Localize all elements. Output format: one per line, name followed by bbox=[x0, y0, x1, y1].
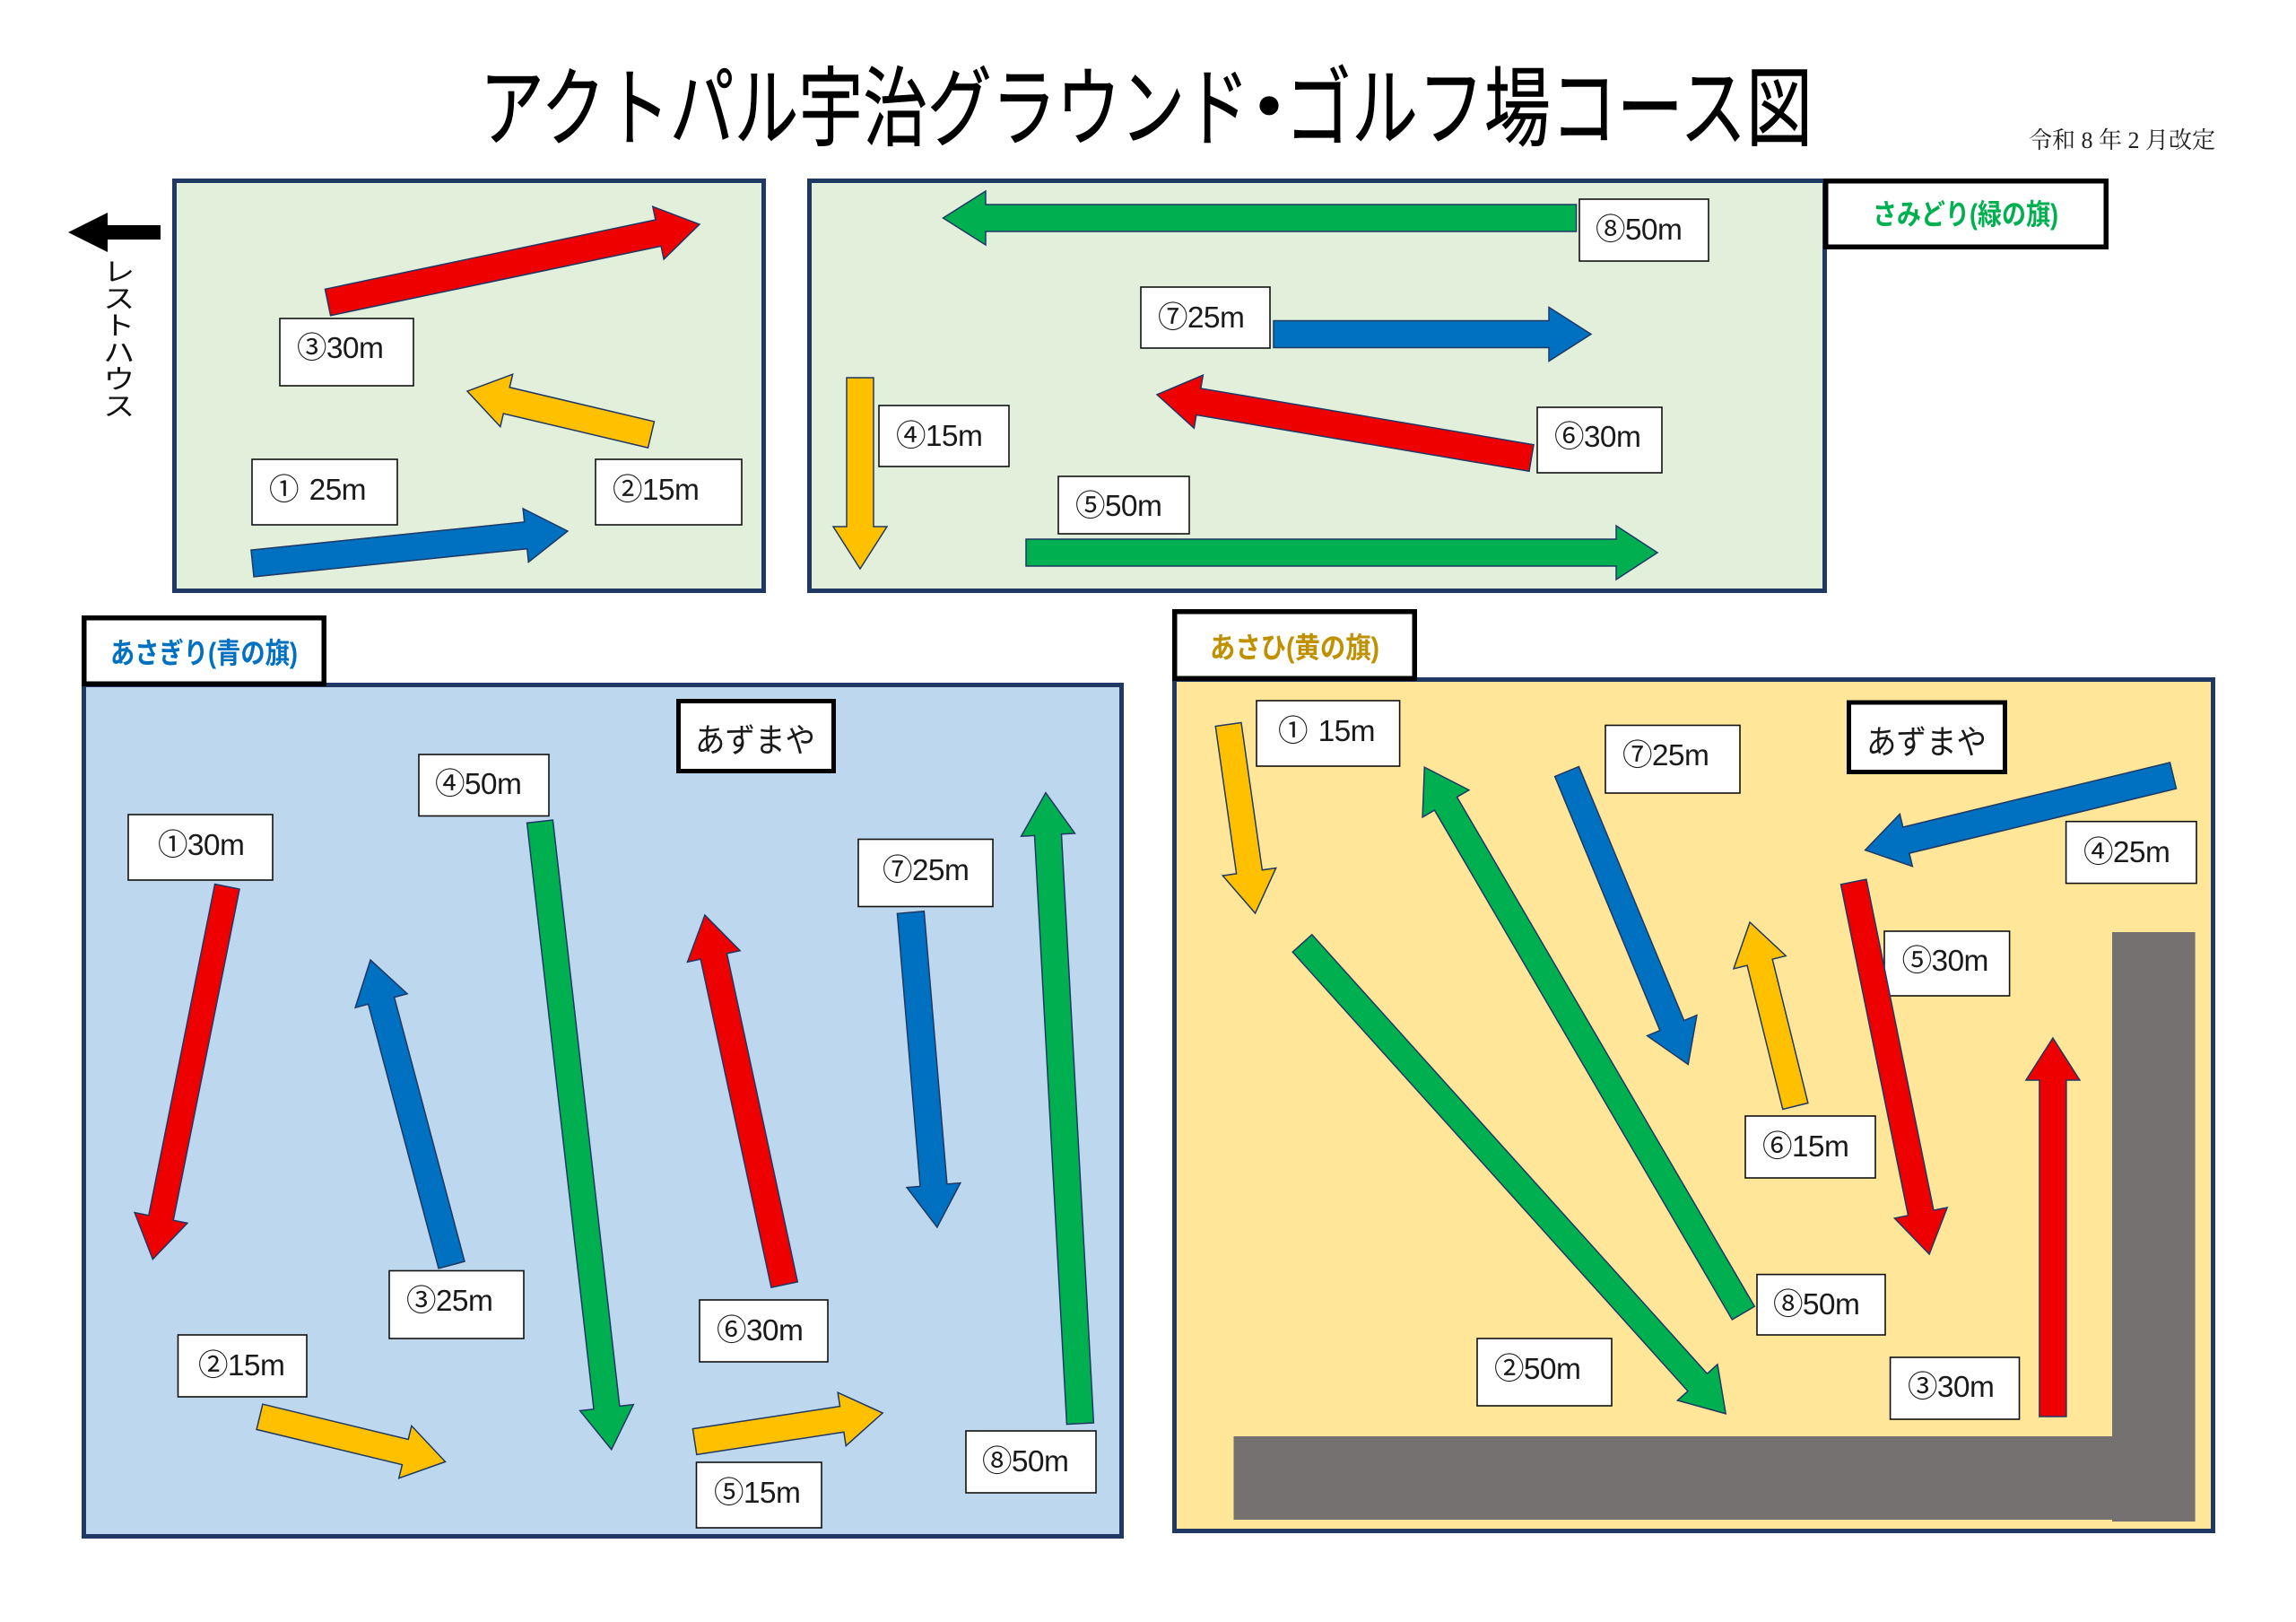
arrow: hole 4 blue bbox=[1859, 749, 2179, 876]
label: hole 5: ⑤50m bbox=[1075, 490, 1161, 523]
arrow: hole 2 green bbox=[1283, 925, 1745, 1432]
arrow: hole 8 green bbox=[1019, 791, 1107, 1425]
label: hole 3 bbox=[280, 318, 413, 386]
label: hole 1: ①30m bbox=[158, 829, 244, 862]
tag: yellow flag course bbox=[1175, 612, 1414, 678]
arrow: hole 8 green bbox=[944, 191, 1577, 245]
label: hole 6: ⑥15m bbox=[1762, 1130, 1848, 1164]
arrow: hole 5 green bbox=[1026, 526, 1657, 580]
callout: azumaya bbox=[1849, 702, 2005, 772]
label: hole 2 bbox=[178, 1335, 307, 1397]
tag: blue flag course: あさぎり(青の旗) bbox=[110, 637, 298, 669]
revision date: 令和 8 年 2 月改定 bbox=[2029, 127, 2215, 153]
label: hole 1: ① 15m bbox=[1278, 715, 1375, 748]
label: hole 6: ⑥30m bbox=[1554, 421, 1640, 454]
label: hole 4: ④15m bbox=[896, 420, 982, 453]
arrow: hole 6 red bbox=[1152, 368, 1536, 484]
arrow: hole 1 red bbox=[126, 881, 254, 1264]
label: hole 5 bbox=[1058, 476, 1189, 534]
title: ゴルフ場コース図 bbox=[1285, 60, 1813, 158]
label: hole 4 bbox=[2066, 822, 2196, 884]
label: hole 1 bbox=[128, 815, 273, 880]
label: hole 3: ③30m bbox=[1908, 1371, 1994, 1404]
label: hole 3 bbox=[389, 1270, 524, 1339]
label: hole 3 bbox=[1891, 1357, 2020, 1419]
label: hole 8 bbox=[1579, 199, 1709, 261]
panel: blue course bbox=[84, 685, 1121, 1536]
arrow: to rest house bbox=[68, 213, 161, 252]
label: hole 8: ⑧50m bbox=[1596, 214, 1682, 247]
label: hole 5: ⑤30m bbox=[1902, 945, 1988, 978]
label: hole 7: ⑦25m bbox=[1158, 301, 1244, 335]
arrow: hole 2 yellow bbox=[461, 365, 657, 461]
label: hole 5 bbox=[696, 1462, 822, 1528]
label: hole 2 bbox=[596, 459, 742, 525]
label: hole 5 bbox=[1884, 931, 2010, 996]
label: hole 3: ③30m bbox=[297, 332, 383, 365]
arrow: hole 7 blue bbox=[1274, 307, 1591, 361]
tag: yellow flag course: あさひ(黄の旗) bbox=[1210, 632, 1379, 664]
arrow: hole 2 yellow bbox=[253, 1391, 452, 1488]
label: hole 4: ④25m bbox=[2083, 836, 2170, 869]
arrow: hole 5 yellow bbox=[691, 1386, 887, 1469]
label: hole 7 bbox=[858, 840, 993, 906]
label: hole 2 bbox=[1477, 1339, 1612, 1406]
label: hole 4 bbox=[419, 754, 549, 816]
arrow: hole 4 green bbox=[513, 818, 639, 1452]
label: hole 5: ⑤15m bbox=[714, 1477, 800, 1510]
label: hole 1 bbox=[252, 459, 397, 525]
arrow: hole 1 yellow bbox=[1202, 720, 1282, 917]
arrow: hole 8 green bbox=[1401, 754, 1767, 1327]
label: hole 3: ③25m bbox=[406, 1285, 492, 1318]
label: hole 7 bbox=[1605, 725, 1740, 793]
callout: azumaya: あずまや bbox=[695, 722, 815, 759]
arrow: hole 7 blue bbox=[1542, 762, 1713, 1075]
label: hole 4: ④50m bbox=[435, 768, 521, 801]
arrow: hole 5 red bbox=[1827, 876, 1956, 1260]
label: hole 1: ① 25m bbox=[269, 474, 366, 507]
label: hole 6 bbox=[1537, 407, 1662, 473]
label: hole 6 bbox=[700, 1300, 828, 1362]
panel: yellow course bbox=[1175, 680, 2213, 1530]
tag: green flag course bbox=[1826, 181, 2106, 247]
label: hole 7 bbox=[1141, 287, 1270, 348]
label: hole 8: ⑧50m bbox=[982, 1445, 1068, 1478]
label: hole 6 bbox=[1745, 1116, 1875, 1178]
arrow: hole 3 blue bbox=[344, 953, 477, 1272]
label: hole 7: ⑦25m bbox=[1622, 739, 1709, 772]
label: hole 2: ②15m bbox=[613, 474, 699, 507]
label: hole 8: ⑧50m bbox=[1773, 1288, 1859, 1321]
label: hole 8 bbox=[966, 1431, 1096, 1493]
arrow: hole 1 blue bbox=[249, 504, 570, 590]
arrow: hole 6 yellow bbox=[1724, 916, 1822, 1112]
arrow: hole 7 blue bbox=[884, 910, 964, 1229]
tag: blue flag course bbox=[84, 618, 324, 684]
arrow: hole 4 yellow bbox=[833, 378, 887, 569]
arrow: hole 3 red bbox=[2026, 1038, 2080, 1417]
callout: azumaya: あずまや bbox=[1866, 724, 1987, 761]
arrow: hole 3 red bbox=[322, 198, 705, 328]
label: hole 6: ⑥30m bbox=[717, 1314, 803, 1347]
callout: azumaya bbox=[678, 702, 834, 772]
label: hole 1 bbox=[1257, 701, 1400, 766]
obstacle: gray L-shaped area bbox=[1234, 932, 2196, 1522]
label: hole 2: ②15m bbox=[198, 1349, 284, 1382]
panel: green course left bbox=[174, 181, 764, 590]
tag: green flag course: さみどり(緑の旗) bbox=[1873, 198, 2058, 231]
label: hole 2: ②50m bbox=[1494, 1353, 1580, 1386]
rest house label: レストハウス bbox=[98, 257, 134, 419]
label: hole 4 bbox=[879, 406, 1009, 467]
title: ・ bbox=[1225, 60, 1313, 158]
panel: green course right bbox=[809, 181, 1824, 590]
arrow: hole 6 red bbox=[679, 910, 811, 1290]
label: hole 8 bbox=[1757, 1275, 1885, 1335]
title: アクトパル宇治グラウンド bbox=[480, 60, 1249, 158]
label: hole 7: ⑦25m bbox=[883, 854, 969, 887]
